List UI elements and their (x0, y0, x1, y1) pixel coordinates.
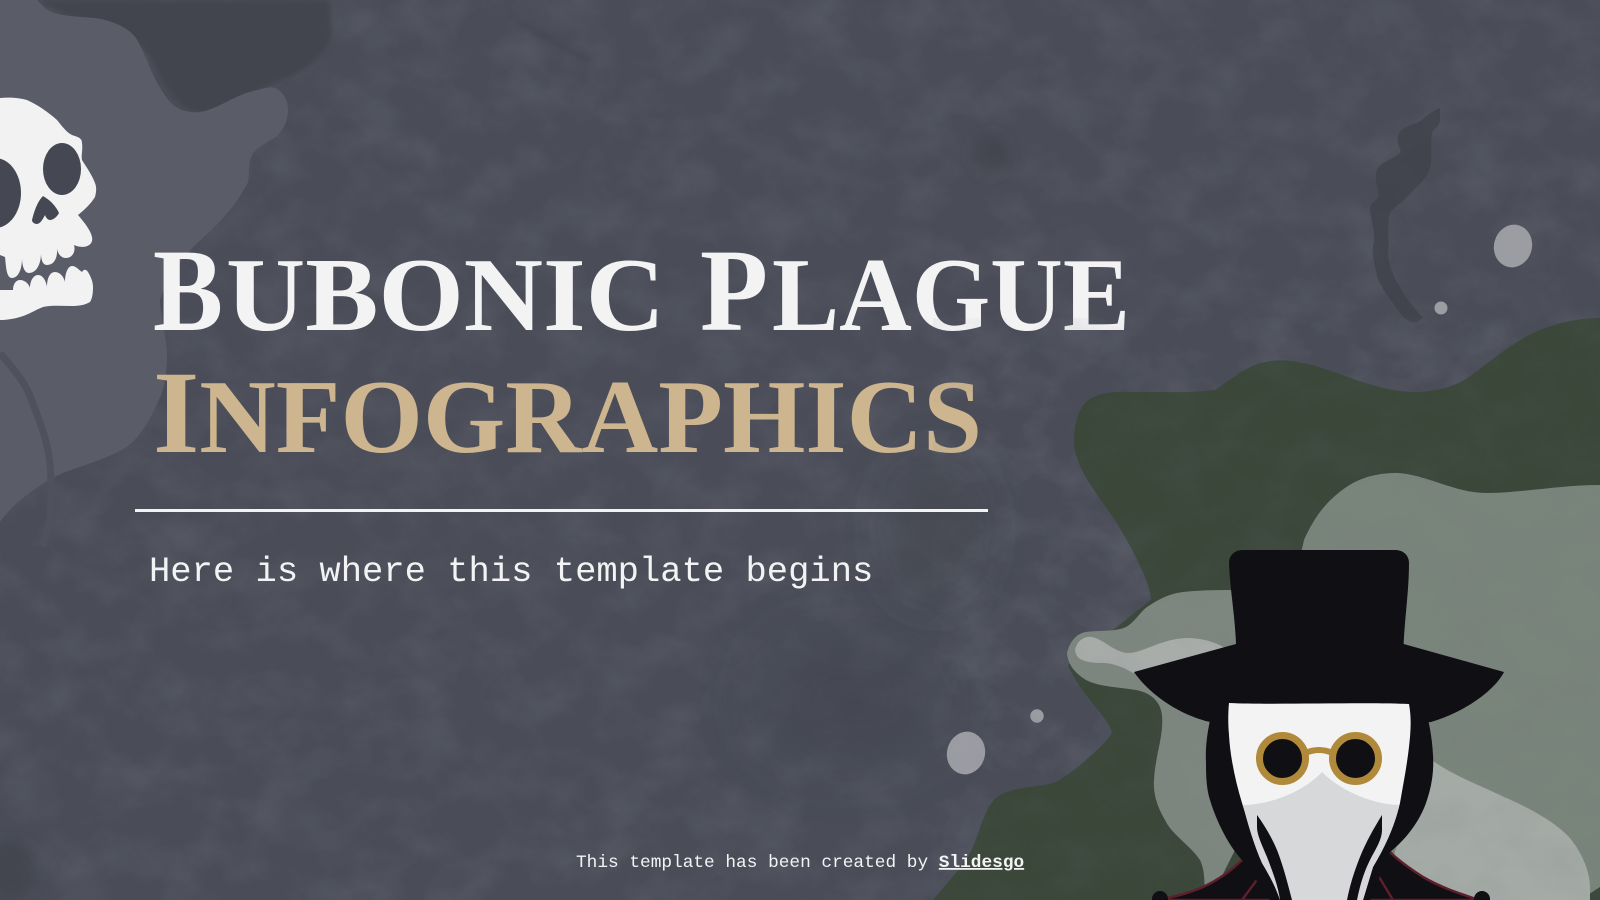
shape texture overlay (933, 318, 1600, 900)
smoke: right plume (1380, 755, 1590, 900)
ghost curved line (0, 354, 51, 546)
coat inner seams (1242, 867, 1393, 900)
smoke: left plume (1067, 590, 1300, 900)
coat (1168, 852, 1473, 900)
beak (1243, 772, 1399, 900)
green blob (933, 318, 1600, 900)
title: B (153, 225, 223, 356)
ghost shape top left (0, 0, 288, 522)
smoke: light tip (1075, 637, 1225, 673)
title: P (700, 225, 768, 356)
dark stain top left (37, 0, 332, 112)
hat (1134, 550, 1504, 735)
goggles (1260, 736, 1378, 782)
shoulder studs (1152, 891, 1490, 900)
footer credit: This template has been created by Slidesgo (576, 853, 1024, 873)
plague doctor figure (1134, 550, 1504, 900)
skull (0, 98, 96, 320)
mask (1228, 703, 1411, 900)
divider line (135, 509, 988, 512)
title: UBONIC (226, 236, 665, 353)
decorative dots (942, 220, 1537, 779)
sage blob (1290, 473, 1600, 900)
title (153, 225, 1130, 478)
title: LAGUE (772, 236, 1130, 353)
hood (1206, 700, 1433, 900)
title: INFOGRAPHICS (153, 347, 982, 478)
nostril slits (1257, 815, 1382, 900)
subtitle: Here is where this template begins (149, 551, 873, 592)
stain: dark crack top right (1370, 108, 1440, 322)
